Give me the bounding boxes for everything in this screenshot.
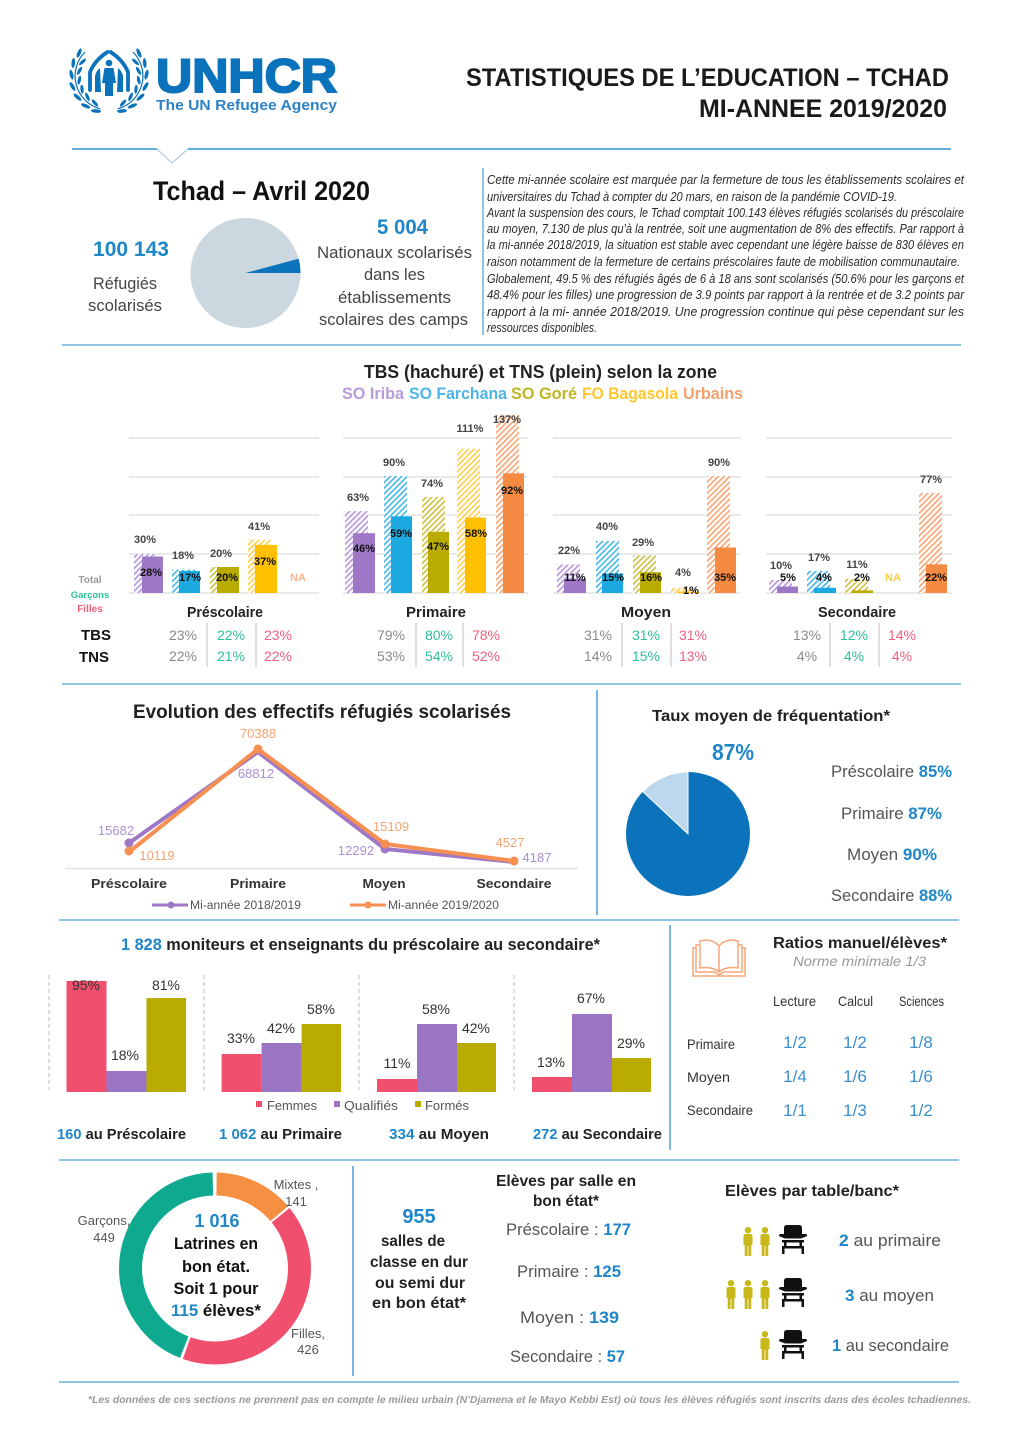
teacher counts by level: 334 au Moyen: [389, 1126, 489, 1143]
table: ratios: 1/1: [783, 1101, 807, 1120]
table: TBS and TNS by sex: 22%: [264, 648, 292, 664]
stat: nationals enrolled: scolaires des camps: [319, 311, 468, 329]
bar chart: teachers primaire: 33%: [227, 1030, 255, 1046]
table: TBS and TNS by sex: 13%: [679, 648, 707, 664]
line chart: 68812: [238, 766, 274, 781]
students per classroom values: Moyen : 139: [520, 1308, 619, 1327]
donut labels: 449: [93, 1230, 115, 1245]
students per classroom values: [506, 1220, 631, 1366]
donut centre text: Soit 1 pour: [174, 1279, 259, 1298]
bar chart: primaire: 137%: [493, 414, 521, 426]
bar chart: moyen: 16%: [640, 572, 662, 584]
donut chart: [130, 1184, 300, 1353]
row: secondary: [760, 1330, 949, 1360]
heading: TBS (hachuré) et TNS (plein) selon la zone: [364, 362, 717, 382]
level headings: Secondaire: [818, 604, 896, 621]
legend: zones: SO Farchana: [409, 384, 508, 403]
bar chart: préscolaire: 18%: [172, 550, 194, 562]
legend: Formés: [425, 1098, 469, 1113]
table: TBS and TNS by sex: 52%: [472, 648, 500, 664]
table: ratios: 1/3: [843, 1101, 867, 1120]
panel: TBS and TNS by zone: [71, 362, 952, 667]
line chart: Primaire: [230, 876, 286, 891]
line chart: 4527: [496, 835, 524, 850]
line chart: 10119: [139, 848, 175, 863]
bar chart: teachers moyen: 11%: [384, 1055, 410, 1071]
title: [466, 64, 949, 123]
table: ratios: 1/2: [909, 1101, 933, 1120]
heading: 1 828 moniteurs et enseignants du préscolaire au secondaire*: [121, 935, 600, 954]
bar chart: teachers primaire: 42%: [267, 1020, 295, 1036]
table: TBS and TNS by sex: 4%: [844, 648, 864, 664]
bar chart: secondaire: 77%: [920, 474, 942, 486]
table: ratios: 1/2: [843, 1033, 867, 1052]
table: ratios: Sciences: [899, 993, 944, 1009]
panel: latrines: [78, 1177, 325, 1357]
table: ratios: Moyen: [687, 1069, 730, 1085]
row: primary: 2 au primaire: [839, 1231, 941, 1250]
bar chart: teachers préscolaire: 81%: [152, 977, 180, 993]
table: ratios: Lecture: [773, 993, 816, 1009]
bar chart: primaire: 63%: [347, 492, 369, 504]
bar chart: moyen: 15%: [602, 572, 624, 584]
bar chart: moyen: [557, 457, 736, 597]
table: ratios: Secondaire: [687, 1102, 753, 1118]
table: TBS and TNS by sex: 53%: [377, 648, 405, 664]
legend: zones: SO Goré: [511, 384, 577, 403]
donut labels: 141: [285, 1194, 307, 1209]
table: TBS and TNS by sex: 14%: [888, 627, 916, 643]
bar chart: moyen: 90%: [708, 457, 730, 469]
teacher counts by level: [57, 1126, 662, 1143]
teacher counts by level: 272 au Secondaire: [533, 1126, 662, 1143]
stat: refugees enrolled: [88, 238, 169, 315]
table: TBS and TNS by sex: 78%: [472, 627, 500, 643]
donut centre text: bon état.: [182, 1257, 250, 1276]
bar chart: primaire: 111%: [457, 423, 484, 435]
bar chart: préscolaire: 20%: [210, 548, 232, 560]
table: TBS and TNS by sex: 4%: [892, 648, 912, 664]
bar chart: secondaire: 2%: [854, 572, 870, 584]
bar chart: secondaire: 11%: [846, 559, 868, 571]
line chart: 70388: [240, 726, 276, 741]
bar chart: primaire: 46%: [353, 543, 375, 555]
text block: introduction: [486, 173, 965, 335]
icon: book: [693, 940, 745, 976]
bar chart: teachers secondaire: 67%: [577, 990, 605, 1006]
legend: total, boys, girls: [71, 575, 109, 615]
table: TBS and TNS by sex: 31%: [679, 627, 707, 643]
text block: introduction: universitaires du Tchad à compter du 20 mars, en raison de la pandémie COVID-19.: [487, 190, 897, 204]
stat: 87%: 87%: [712, 739, 754, 765]
bar chart: moyen: 1%: [683, 585, 699, 597]
panel: enrolment evolution: [65, 702, 578, 912]
bar chart: préscolaire: 17%: [179, 572, 201, 584]
table: TBS and TNS by sex: 12%: [840, 627, 868, 643]
row: secondary: 1 au secondaire: [832, 1336, 949, 1355]
table: TBS and TNS by sex: 23%: [169, 627, 197, 643]
donut labels: 426: [297, 1342, 319, 1357]
bar chart: teachers secondaire: 13%: [537, 1054, 565, 1070]
table: TBS and TNS by sex: 14%: [584, 648, 612, 664]
logo: UNHCR: [68, 48, 338, 114]
logo wordmark: UNHCR: [156, 49, 337, 102]
stat: refugees enrolled: scolarisés: [88, 297, 162, 315]
stat: classrooms in good condition: [370, 1206, 468, 1312]
panel: students per desk: [725, 1183, 949, 1360]
pie chart: attendance: [626, 772, 750, 896]
stat: classrooms in good condition: en bon état*: [372, 1295, 467, 1312]
attendance by level: Primaire 87%: [841, 805, 942, 823]
heading: Evolution des effectifs réfugiés scolarisés: [133, 702, 511, 723]
bar chart: moyen: 35%: [714, 572, 736, 584]
donut centre text: 115 élèves*: [171, 1301, 261, 1320]
bar chart: préscolaire: 20%: [216, 572, 238, 584]
heading: Ratios manuel/élèves*: [773, 935, 948, 952]
bar chart: primaire: 47%: [427, 541, 449, 553]
bar chart: teachers primaire: [222, 1001, 341, 1092]
text block: introduction: Cette mi-année scolaire est marquée par la fermeture de tous les établissements scolaires et: [487, 173, 964, 187]
pie chart: refugees vs nationals: [190, 218, 300, 328]
line chart: [65, 726, 578, 891]
heading: [496, 1173, 636, 1210]
legend: Mi-année 2018/2019: [190, 900, 301, 912]
stat: classrooms in good condition: classe en dur: [370, 1254, 468, 1271]
legend: zones: FO Bagasola: [582, 384, 678, 403]
legend: zones: SO Iriba: [342, 384, 405, 403]
table: TBS and TNS by sex: 22%: [169, 648, 197, 664]
heading: Taux moyen de fréquentation*: [652, 708, 891, 725]
stat: nationals enrolled: établissements: [338, 289, 451, 307]
row: middle: 3 au moyen: [845, 1286, 934, 1305]
text block: introduction: 48.4% pour les filles) une progression de 3.9 points par rapport à la rentrée et de 3.2 points par: [487, 288, 965, 302]
table: TBS and TNS by sex: TBS: [81, 627, 111, 644]
bar chart: primaire: 92%: [501, 485, 523, 497]
bar chart: primaire: 59%: [390, 528, 412, 540]
level headings: Moyen: [621, 604, 671, 621]
level headings: Préscolaire: [187, 604, 263, 621]
table: ratios: 1/6: [843, 1067, 867, 1086]
text block: introduction: Avant la suspension des cours, le Tchad comptait 100.143 élèves réfugiés scolarisés du préscolaire: [486, 206, 964, 220]
panel: Tchad avril 2020: [88, 176, 472, 329]
students per classroom values: Primaire : 125: [517, 1262, 621, 1281]
text block: introduction: Globalement, 49.5 % des réfugiés âgés de 6 à 18 ans sont scolarisés (50.6% pour les garçons et: [487, 272, 964, 286]
table: TBS and TNS by sex: 79%: [377, 627, 405, 643]
footnote: *Les données de ces sections ne prennent pas en compte le milieu urbain (N’Djamena et le Mayo Kebbi Est) où tous les élèves réfugiés sont inscrits dans des écoles tchadiennes.: [88, 1394, 971, 1406]
legend: total, boys, girls: Garçons: [71, 590, 109, 601]
donut centre text: Latrines en: [174, 1234, 258, 1253]
donut labels: Mixtes ,: [274, 1177, 318, 1192]
stat: refugees enrolled: Réfugiés: [93, 275, 157, 293]
table: TBS and TNS by sex: 80%: [425, 627, 453, 643]
table: ratios: 1/8: [909, 1033, 933, 1052]
row: middle: [726, 1278, 934, 1309]
table: TBS and TNS by sex: 31%: [632, 627, 660, 643]
legend: total, boys, girls: Total: [78, 575, 102, 586]
bar chart: teachers moyen: [377, 1001, 496, 1092]
bar chart: teachers moyen: 42%: [462, 1020, 490, 1036]
legend: zones: Urbains: [683, 384, 743, 403]
bar chart: teachers préscolaire: 95%: [72, 977, 100, 993]
bar chart: primaire: 90%: [383, 457, 405, 469]
bar chart: primaire: 74%: [421, 478, 443, 490]
stat: classrooms in good condition: 955: [402, 1206, 436, 1228]
bar chart: secondaire: [769, 474, 947, 593]
table: TBS and TNS by sex: TNS: [79, 649, 109, 666]
title: MI-ANNEE 2019/2020: [699, 95, 947, 123]
table: TBS and TNS by sex: 4%: [797, 648, 817, 664]
level headings: Primaire: [406, 604, 466, 621]
line chart: Moyen: [362, 876, 406, 891]
bar chart: préscolaire: 37%: [254, 556, 276, 568]
bar chart: secondaire: 10%: [770, 560, 792, 572]
attendance by level: Préscolaire 85%: [831, 763, 952, 781]
text block: introduction: la mi-année 2018/2019, la situation est stable avec cependant une légère baisse de 830 élèves en: [487, 238, 964, 252]
table: TBS and TNS by sex: 31%: [584, 627, 612, 643]
legend: Qualifiés: [344, 1098, 399, 1113]
panel: textbook ratios: [687, 935, 948, 1120]
students per classroom values: Préscolaire : 177: [506, 1220, 631, 1239]
heading: bon état*: [533, 1193, 600, 1210]
bar chart: secondaire: 22%: [925, 572, 947, 584]
bar chart: primaire: [345, 414, 524, 593]
panel: teachers: [49, 935, 662, 1143]
bar chart: moyen: 11%: [564, 572, 586, 584]
text block: introduction: au moyen, 7.130 de plus qu’à la rentrée, soit une augmentation de 8% des effectifs. Par rapport à: [487, 222, 964, 236]
stat: refugees enrolled: 100 143: [93, 238, 169, 261]
table: ratios: [687, 993, 944, 1120]
bar chart: secondaire: NA: [885, 572, 901, 584]
legend: zones: [342, 384, 743, 403]
table: ratios: Primaire: [687, 1036, 735, 1052]
bar chart: préscolaire: NA: [290, 572, 306, 584]
panel: students per classroom: [496, 1173, 636, 1366]
title: STATISTIQUES DE L’EDUCATION – TCHAD: [466, 64, 949, 92]
logo tagline: The UN Refugee Agency: [156, 97, 338, 114]
legend: Femmes: [267, 1098, 317, 1113]
stat: nationals enrolled: 5 004: [377, 216, 428, 239]
row: primary: [744, 1225, 941, 1256]
bar chart: moyen: 40%: [596, 521, 618, 533]
table: ratios: Calcul: [838, 993, 873, 1009]
text block: introduction: raison notamment de la fermeture de certains préscolaires faute de mobilisation communautaire.: [487, 255, 960, 269]
bar chart: secondaire: 5%: [780, 572, 796, 584]
bar chart: secondaire: 17%: [808, 552, 830, 564]
teacher counts by level: 160 au Préscolaire: [57, 1126, 186, 1143]
bar chart: moyen: 22%: [558, 545, 580, 557]
text block: introduction: ressources disponibles.: [487, 321, 597, 335]
line chart: Secondaire: [476, 876, 552, 891]
table: ratios: 1/2: [783, 1033, 807, 1052]
bar chart: préscolaire: 28%: [140, 567, 162, 579]
donut labels: [78, 1177, 325, 1357]
bar chart: moyen: 4%: [675, 567, 691, 579]
bar chart: préscolaire: 30%: [134, 534, 156, 546]
attendance by level: Moyen 90%: [847, 846, 937, 864]
bar chart: teachers préscolaire: 18%: [111, 1047, 139, 1063]
bar chart: teachers moyen: 58%: [422, 1001, 450, 1017]
table: TBS and TNS by sex: 23%: [264, 627, 292, 643]
line chart: 15109: [373, 819, 409, 834]
bar chart: préscolaire: [134, 521, 306, 593]
bar chart: moyen: 29%: [632, 537, 654, 549]
stat: nationals enrolled: dans les: [364, 266, 425, 284]
stat: nationals enrolled: Nationaux scolarisés: [317, 244, 472, 262]
bar chart: préscolaire: 41%: [248, 521, 270, 533]
legend: [256, 1098, 469, 1113]
heading: Elèves par salle en: [496, 1173, 636, 1190]
text block: introduction: rapport à la mi- année 2018/2019. Une progression continue qui pèse cependant sur les: [487, 305, 964, 319]
bar chart: secondaire: 4%: [816, 572, 832, 584]
stat: nationals enrolled: [317, 216, 472, 329]
donut centre text: [171, 1211, 261, 1320]
table: TBS and TNS by sex: 13%: [793, 627, 821, 643]
table: TBS and TNS by sex: 54%: [425, 648, 453, 664]
bar chart: teachers secondaire: 29%: [617, 1035, 645, 1051]
panel: average attendance: [626, 708, 952, 905]
table: TBS and TNS by sex: 15%: [632, 648, 660, 664]
legend: Mi-année 2019/2020: [388, 900, 499, 912]
legend: [152, 900, 499, 912]
line chart: 4187: [523, 850, 551, 865]
bar chart: teachers préscolaire: [66, 977, 186, 1092]
table: TBS and TNS by sex: 22%: [217, 627, 245, 643]
line chart: 12292: [338, 843, 374, 858]
heading: Tchad – Avril 2020: [153, 176, 370, 206]
table: ratios: 1/4: [783, 1067, 807, 1086]
minimum standard: Norme minimale 1/3: [793, 953, 926, 969]
bar chart: teachers secondaire: [532, 990, 651, 1092]
bar chart: primaire: 58%: [465, 528, 487, 540]
attendance by level: Secondaire 88%: [831, 887, 952, 905]
line chart: 15682: [98, 823, 134, 838]
level headings: [187, 604, 896, 621]
donut labels: Filles,: [291, 1326, 325, 1341]
students per classroom values: Secondaire : 57: [510, 1347, 625, 1366]
donut centre text: 1 016: [194, 1211, 240, 1231]
line chart: Préscolaire: [91, 876, 167, 891]
stat: classrooms in good condition: salles de: [381, 1233, 445, 1250]
table: ratios: 1/6: [909, 1067, 933, 1086]
table: TBS and TNS by sex: 21%: [217, 648, 245, 664]
attendance by level: [831, 763, 952, 905]
table: TBS and TNS by sex: [79, 623, 916, 667]
icon: laurel and sheltering hands: [68, 48, 150, 113]
bar chart: teachers primaire: 58%: [307, 1001, 335, 1017]
heading: Elèves par table/banc*: [725, 1183, 900, 1200]
stat: classrooms in good condition: ou semi dur: [375, 1275, 465, 1292]
donut labels: Garçons,: [78, 1213, 130, 1228]
legend: total, boys, girls: Filles: [77, 604, 103, 615]
teacher counts by level: 1 062 au Primaire: [219, 1126, 342, 1143]
